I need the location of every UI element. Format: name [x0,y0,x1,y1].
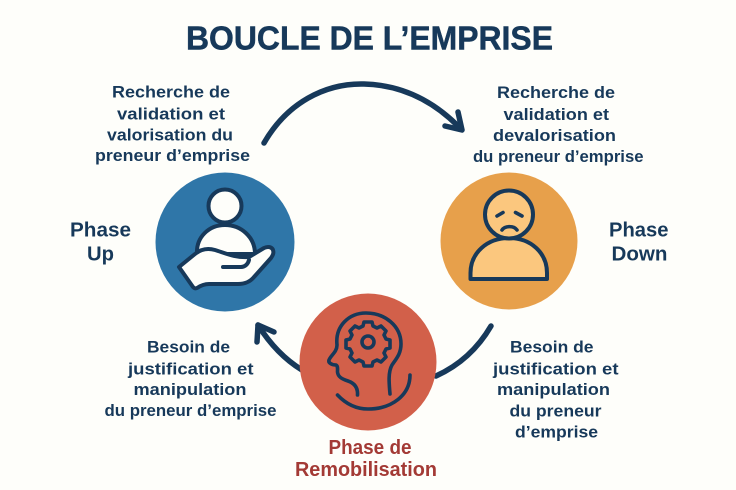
label: Phase de Remobilisation: Remobilisation [295,459,437,481]
text: top left: valorisation du [107,126,233,144]
text: top right [473,83,644,166]
text: bottom left: manipulation [134,380,246,399]
text: top left: Recherche de [112,82,230,102]
label: Phase de Remobilisation [295,437,437,481]
icon: Phase Down circle with sad person [440,172,578,310]
text: bottom right: justification et [492,360,619,378]
text: top right: Recherche de [497,83,615,102]
label: Phase Up: Phase [70,218,131,242]
label: Phase Up [70,218,131,266]
arrow: bottom right, from Phase Down to Remobilisation [436,326,491,376]
text: top right: devalorisation [493,126,616,145]
text: top left [95,82,250,165]
text: bottom right: Besoin de [510,338,594,356]
text: bottom left: Besoin de [147,338,230,356]
arrow: top, from Phase Up to Phase Down [264,84,462,143]
text: top right: validation et [504,105,609,124]
text: bottom right: manipulation [497,380,610,399]
text: bottom left: du preneur d’emprise [104,401,276,420]
label: Phase de Remobilisation: Phase de [328,437,412,459]
label: Phase Down: Phase [609,218,668,242]
text: bottom right [492,338,619,442]
icon: Phase Up circle with person on hand [156,172,294,312]
text: bottom left [104,338,276,420]
title: BOUCLE DE L’EMPRISE [186,20,553,56]
text: top left: validation et [117,104,225,124]
label: Phase Up: Up [87,242,114,266]
label: Phase Down [609,218,668,266]
text: bottom right: du preneur [510,402,602,420]
label: Phase Down: Down [612,242,668,266]
text: bottom left: justification et [127,360,254,378]
text: bottom right: d’emprise [515,422,598,442]
text: top right: du preneur d’emprise [473,147,644,166]
icon: Remobilisation circle with head and gear [300,294,436,430]
text: top left: preneur d’emprise [95,146,250,165]
arrow: bottom left, from Remobilisation to Phase Up [257,325,302,370]
